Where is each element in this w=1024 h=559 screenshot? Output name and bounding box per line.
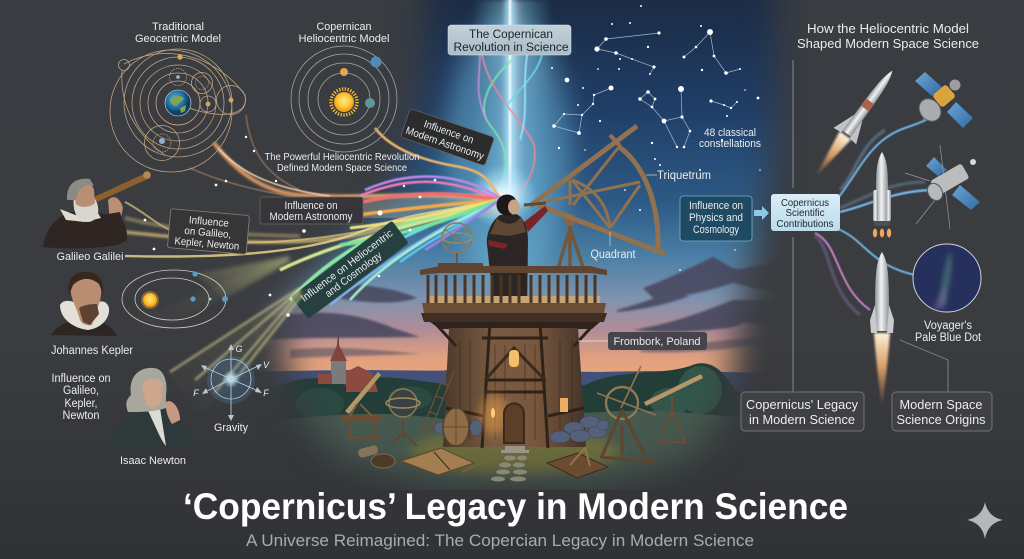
- icon: rocket lower with flame: [870, 252, 894, 410]
- frame right front: [547, 453, 608, 478]
- beam: Newton light wedge: [165, 288, 305, 415]
- frame: [530, 126, 665, 254]
- stream: rainbow bundle: [280, 177, 500, 305]
- labels: instrument names: [590, 127, 761, 261]
- diagram: gravity: [193, 344, 270, 434]
- instruments on the ground: [343, 366, 703, 482]
- ladder: [420, 370, 454, 437]
- label: Isaac Newton: [120, 455, 186, 467]
- icon: Voyager pale blue dot: [913, 244, 982, 344]
- wheel instrument: [606, 387, 638, 419]
- horizon hills: [263, 370, 758, 393]
- heading: geocentric: Geocentric Model: [135, 33, 221, 45]
- box: Copernicus' Legacy in Modern Science: [741, 392, 864, 431]
- text: heliocentric revolution caption: The Powerful Heliocentric Revolution: [264, 151, 420, 163]
- rainbow influence streams: [125, 115, 500, 317]
- connector: to space science origins: [900, 340, 948, 392]
- diagram: heliocentric orbits: [291, 46, 397, 152]
- diagram: gravity: G: [235, 344, 243, 354]
- subtitle: A Universe Reimagined: The Copercian Legacy in Modern Science: [246, 531, 754, 550]
- callout: Frombork, Poland: [578, 332, 707, 350]
- box: influence on physics and cosmology: [680, 196, 752, 241]
- label: Galileo Galilei: [56, 251, 124, 263]
- board: [401, 448, 474, 475]
- text: influence on Galileo, Kepler, Newton: Galileo,: [63, 385, 99, 397]
- scrolls: [357, 445, 379, 458]
- label: Johannes Kepler: [51, 345, 133, 357]
- instrument: triquetrum and quadrant: [524, 126, 665, 272]
- box: Modern Space Science Origins: [892, 392, 992, 431]
- box: Copernicus scientific contributions: [771, 194, 840, 231]
- box: Modern Space Science Origins: Modern Space: [900, 397, 982, 412]
- callout: influence on modern astronomy: Influence on: [284, 200, 338, 212]
- labels: instrument names: Triquetrum: [657, 170, 711, 182]
- title card: The Copernican Revolution in Science: Revolution in Science: [454, 42, 568, 54]
- callout: influence on modern astronomy: [260, 197, 363, 224]
- callout: influence on modern astronomy (rotated): Modern Astronomy: [404, 125, 486, 163]
- tower platform with railing: [420, 266, 607, 329]
- icon: satellite lower: [905, 145, 980, 229]
- diagram: gravity: V: [263, 360, 270, 370]
- callout: influence on Galileo, Kepler, Newton: [167, 209, 250, 254]
- light beam: [469, 0, 552, 231]
- dusk clouds: [260, 257, 780, 358]
- streams: to spacecraft: [815, 118, 930, 315]
- diagram: Kepler orbits: [110, 256, 295, 335]
- stream: rainbow underglow: [345, 200, 500, 212]
- text: influence on Galileo, Kepler, Newton: Newton: [62, 410, 100, 422]
- heading: heliocentric: Heliocentric Model: [298, 33, 390, 45]
- panel: geocentric model: [110, 21, 246, 172]
- path stones: [491, 456, 527, 482]
- door: [504, 404, 524, 443]
- figure: Isaac Newton: [112, 368, 193, 467]
- label: Voyager's: [924, 320, 972, 332]
- box: Copernicus scientific contributions: Scientific: [786, 208, 824, 219]
- ground: [294, 411, 732, 490]
- arrow: to scientific contributions: [754, 206, 769, 220]
- icon: Voyager pale blue dot: Pale Blue Dot: [915, 332, 982, 344]
- text: influence on Galileo, Kepler, Newton: [52, 373, 110, 422]
- callout: influence on heliocentric and cosmology: Influence on Heliocentric: [299, 228, 395, 305]
- figure: Copernicus on platform: [487, 194, 548, 310]
- key: [462, 460, 488, 472]
- stream: Galileo golden: [125, 200, 500, 257]
- heading: heliocentric: Copernican: [316, 21, 372, 33]
- title card: The Copernican Revolution in Science: [448, 25, 571, 55]
- lantern glow: [480, 395, 508, 435]
- diagram: gravity: F: [263, 388, 269, 398]
- heading: geocentric: Traditional: [152, 21, 204, 33]
- heading: geocentric: [135, 21, 221, 45]
- telescope right: [644, 374, 703, 406]
- callout: influence on modern astronomy: Modern Astronomy: [270, 211, 353, 223]
- callout: influence on Galileo, Kepler, Newton: Kepler, Newton: [174, 235, 240, 253]
- callout: influence on modern astronomy (rotated): [401, 108, 494, 166]
- callout: influence on Galileo, Kepler, Newton: on Galileo,: [184, 225, 232, 241]
- stand: [557, 226, 584, 272]
- text: heliocentric revolution caption: Defined Modern Space Science: [277, 162, 407, 174]
- callout: influence on Galileo, Kepler, Newton: Influence: [188, 214, 229, 230]
- labels: instrument names: constellations: [699, 138, 761, 150]
- callout: influence on heliocentric and cosmology: and Cosmology: [323, 249, 385, 300]
- telescope: [94, 172, 150, 202]
- figure: Galileo Galilei: [43, 171, 151, 263]
- callout: influence on modern astronomy (rotated): Influence on: [422, 118, 475, 146]
- panel: heliocentric model: [291, 21, 397, 152]
- text: influence on Galileo, Kepler, Newton: Influence on: [52, 373, 110, 385]
- telescope left: [345, 372, 381, 414]
- heading: how the heliocentric model shaped space science: Shaped Modern Space Science: [797, 36, 979, 51]
- diagram: geocentric orbits: [110, 49, 246, 172]
- tower: [434, 322, 609, 453]
- night sky and Frombork landscape: [250, 0, 810, 490]
- box: Copernicus scientific contributions: Contributions: [776, 219, 834, 230]
- heading: how the heliocentric model shaped space science: How the Heliocentric Model: [807, 21, 969, 36]
- divider: [792, 60, 794, 392]
- figure: Johannes Kepler: [51, 272, 133, 357]
- box: influence on physics and cosmology: Physics and: [689, 212, 743, 224]
- armillary sphere on desk: [438, 223, 483, 268]
- main title: ‘Copernicus’ Legacy in Modern Science: [183, 486, 848, 527]
- box: influence on physics and cosmology: Cosmology: [693, 224, 739, 236]
- icon: rocket centre: [873, 152, 891, 238]
- callout: influence on heliocentric and cosmology: [291, 221, 409, 319]
- tree line: [274, 363, 741, 419]
- icon: sparkle: [967, 502, 1003, 539]
- text: heliocentric revolution caption: [264, 151, 420, 174]
- constellations: [552, 29, 741, 148]
- window: [509, 350, 519, 367]
- icon: rocket launching diagonally: [803, 62, 904, 186]
- stream: sparkles: [144, 136, 436, 317]
- labels: instrument names: 48 classical: [704, 127, 756, 139]
- sky glow around beam: [446, 15, 570, 285]
- stream: geocentric to tower: [190, 115, 500, 200]
- box: Modern Space Science Origins: Science Origins: [896, 412, 986, 427]
- title card: The Copernican Revolution in Science: The Copernican: [469, 29, 553, 41]
- Kepler light wedges: [195, 256, 290, 299]
- icon: Sun: [331, 89, 357, 115]
- distant church: [318, 330, 378, 392]
- wheel: [443, 408, 469, 446]
- box: Copernicus scientific contributions: Copernicus: [781, 198, 829, 209]
- label: Gravity: [214, 422, 248, 434]
- box: Copernicus' Legacy in Modern Science: in Modern Science: [749, 412, 855, 427]
- box: influence on physics and cosmology: Influence on: [689, 200, 743, 212]
- star field: [551, 5, 761, 271]
- icon: Earth: [165, 90, 191, 116]
- box: Copernicus' Legacy in Modern Science: Copernicus' Legacy: [746, 397, 858, 412]
- text: influence on Galileo, Kepler, Newton: Kepler,: [64, 398, 98, 410]
- diagram: gravity: F: [193, 388, 199, 398]
- stones: [434, 416, 609, 443]
- labels: instrument names: Quadrant: [590, 249, 636, 261]
- heading: how the heliocentric model shaped space science: [797, 21, 979, 51]
- callout: Frombork, Poland: Frombork, Poland: [614, 336, 700, 348]
- heading: heliocentric: [298, 21, 390, 45]
- icon: satellite upper: [915, 72, 973, 128]
- armillary: [389, 389, 417, 417]
